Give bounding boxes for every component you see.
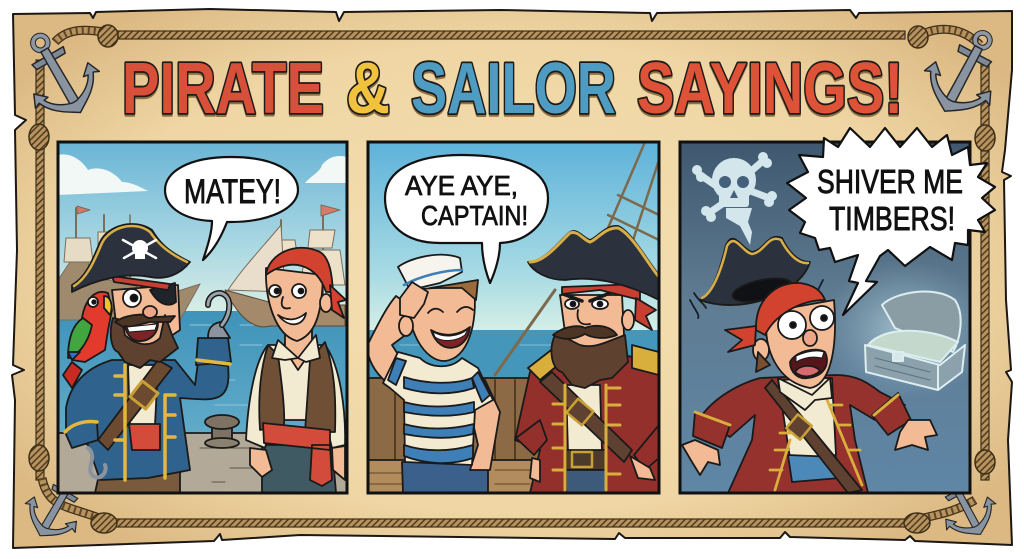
pirate: lower hook xyxy=(88,448,106,477)
pirate: shirt xyxy=(778,378,836,458)
pirate: left cuff and hand xyxy=(693,412,730,448)
sailor: hair xyxy=(430,280,478,300)
sailing ships xyxy=(58,205,345,327)
sailor: neck and collar xyxy=(285,325,312,370)
sailor: bandana xyxy=(266,248,333,292)
sailor: striped shirt xyxy=(383,352,493,465)
pirate: eye xyxy=(123,289,141,307)
panel: Aye aye, captain xyxy=(368,142,659,493)
pirate: bandana xyxy=(756,283,825,335)
pirate: strap and buckle xyxy=(765,380,862,493)
sailor: sash xyxy=(263,423,332,486)
panel: Matey xyxy=(58,142,347,493)
pirate: beard xyxy=(111,315,178,368)
pirate: hook xyxy=(208,322,230,338)
captain: beard xyxy=(551,335,628,388)
sailor: shirt xyxy=(246,345,345,448)
pirate: right cuff and hand xyxy=(872,393,911,435)
sailor: saluting hand xyxy=(400,282,428,318)
title: & xyxy=(346,49,390,129)
panel 1 frame xyxy=(58,142,347,493)
title: SAILOR xyxy=(411,49,616,129)
burst speech bubble: Shiver me timbers: TIMBERS! xyxy=(829,200,955,237)
pirate: coat xyxy=(700,375,905,493)
pirate: trousers and sash xyxy=(780,470,850,493)
anchor: bottom right xyxy=(925,463,1005,547)
pirate: collar xyxy=(778,378,832,410)
captain: shirt xyxy=(566,385,602,452)
ghost glow xyxy=(820,260,990,400)
anchor: top left xyxy=(5,18,112,131)
pirate: face xyxy=(112,285,180,350)
bollard xyxy=(205,415,239,448)
title: PIRATE xyxy=(122,49,324,129)
speech bubble: Matey xyxy=(165,157,298,260)
pirate: screaming mouth xyxy=(790,350,827,378)
title: SAYINGS! xyxy=(637,49,903,129)
captain: belt and pants xyxy=(566,450,606,470)
sailor: closed eyes and smile xyxy=(428,307,473,313)
pirate: gold trim xyxy=(770,395,862,490)
captain: face xyxy=(560,295,624,355)
motion lines xyxy=(690,280,823,318)
anchor: bottom left xyxy=(15,462,99,550)
pirate: gold trim xyxy=(115,365,175,480)
pirate: legs xyxy=(94,472,181,492)
sailor: arm and right arm xyxy=(368,296,424,385)
captain: cuffs and hands xyxy=(516,420,659,470)
ghost skull and crossbones xyxy=(692,152,777,245)
pirate: moustache and mouth xyxy=(115,315,175,328)
captain: bandana xyxy=(562,284,640,300)
panel 3 frame xyxy=(680,142,970,493)
dock xyxy=(58,433,347,493)
pirate: shirt and sash xyxy=(128,365,158,425)
parrot xyxy=(63,292,112,388)
captain: coat xyxy=(515,355,659,493)
captain: moustache xyxy=(553,326,617,339)
title xyxy=(122,49,903,129)
captain: eyes and brows xyxy=(565,299,579,309)
captain: epaulettes xyxy=(528,345,659,380)
sky xyxy=(58,142,347,312)
speech bubble: Aye aye, captain xyxy=(385,155,548,283)
captain: strap and buckle xyxy=(540,372,632,462)
rigging xyxy=(495,142,659,375)
sky xyxy=(368,142,659,332)
deck floor xyxy=(368,460,659,493)
sailor: head xyxy=(408,285,475,361)
treasure chest xyxy=(865,292,965,390)
sea xyxy=(58,311,347,436)
pirate: lower cuff xyxy=(65,421,98,448)
pirate: raised cuff xyxy=(196,338,231,365)
pirate: nose xyxy=(143,306,157,318)
sailor: eyes xyxy=(269,285,281,297)
pirate: eyes xyxy=(778,311,806,339)
pirate: strap and buckle xyxy=(98,360,172,450)
pirate: coat and raised arm xyxy=(66,360,229,480)
pirate: eye patch xyxy=(150,283,176,305)
panel: Shiver me timbers xyxy=(680,128,995,493)
speech bubble: Aye aye, captain: CAPTAIN! xyxy=(421,200,528,231)
sailor: vest xyxy=(259,342,335,432)
burst speech bubble: Shiver me timbers xyxy=(787,128,995,315)
sailor: white hat xyxy=(398,255,462,290)
sailor: legs xyxy=(262,445,336,493)
sailor: nose and mouth xyxy=(282,297,290,308)
pirate: nose xyxy=(803,330,817,346)
sailor: head xyxy=(266,268,323,341)
pirate: blue sash xyxy=(788,455,840,482)
clouds xyxy=(58,154,347,195)
pirate: hat xyxy=(72,224,190,292)
sailor: hands xyxy=(250,446,345,480)
sailor: pants xyxy=(402,462,488,493)
pirate: head xyxy=(766,300,835,388)
anchor: top right xyxy=(912,16,1019,129)
deck railing xyxy=(370,377,539,460)
sea xyxy=(368,330,659,380)
captain: hat xyxy=(528,226,659,300)
pirate: skull and crossbones xyxy=(123,240,156,259)
captain: gold trim xyxy=(553,385,620,490)
panel 2 frame xyxy=(368,142,659,493)
dark background xyxy=(680,142,970,493)
speech bubble: Matey: MATEY! xyxy=(184,173,281,211)
burst speech bubble: Shiver me timbers: SHIVER ME xyxy=(817,163,963,200)
flying hat xyxy=(700,237,810,305)
speech bubble: Aye aye, captain: AYE AYE, xyxy=(405,170,518,201)
